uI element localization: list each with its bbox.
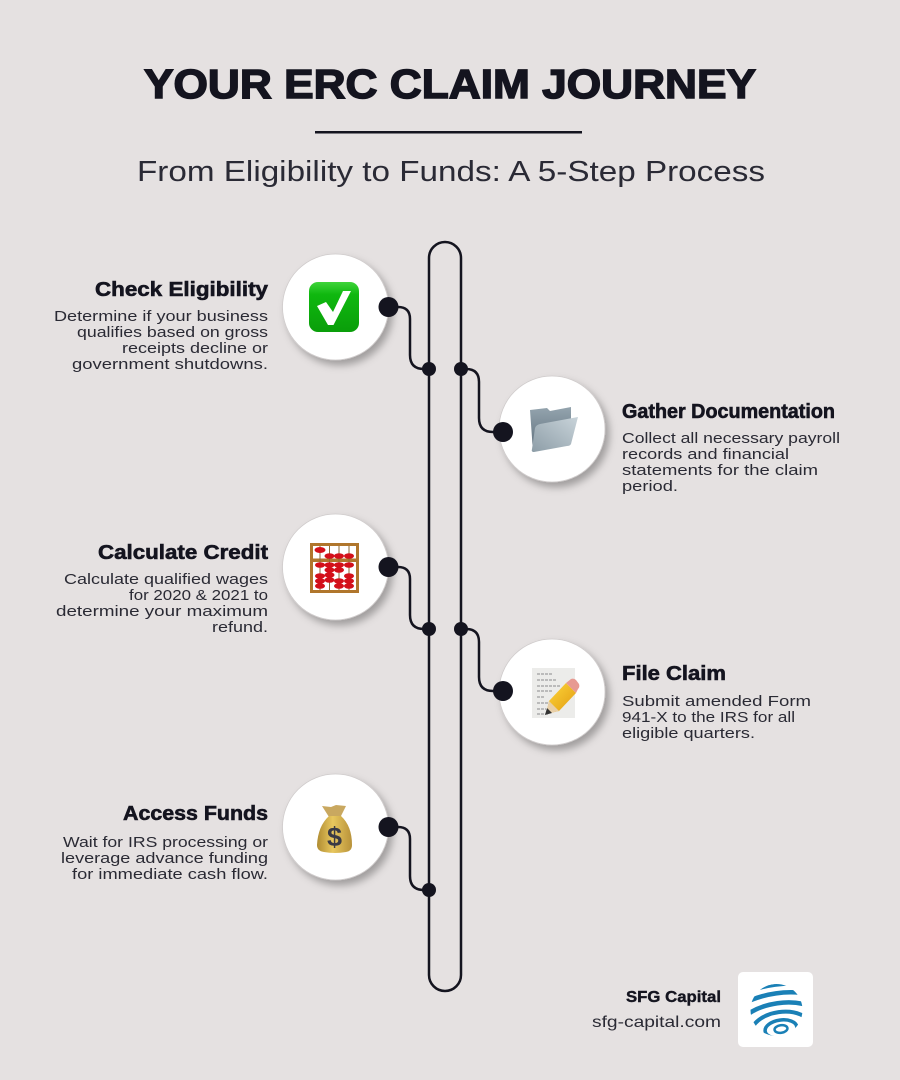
connector: step 4 [454,622,503,691]
icon: memo and pencil [493,639,605,745]
step 1 description: government shutdowns. [72,356,268,373]
connector: step 1 [389,307,436,376]
icon: money bag [282,774,398,880]
connector: step 5 [389,827,436,897]
subtitle: From Eligibility to Funds: A 5-Step Process [137,156,765,188]
step 1 description: receipts decline or [122,340,268,357]
footer brand [592,972,813,1047]
step 2: gather documentation [493,376,840,495]
step 4 heading: File Claim [622,663,726,685]
icon: money bag: $ [327,822,342,852]
title: YOUR ERC CLAIM JOURNEY [144,61,756,107]
connector: step 2 [454,362,503,432]
step 1: check eligibility [54,254,398,373]
step 1 description [54,308,268,373]
step 3 description: for 2020 & 2021 to [129,587,268,604]
step 2 description: statements for the claim [622,462,818,479]
step 3 heading: Calculate Credit [98,542,268,564]
step 4: file claim [493,639,811,745]
step 4 description [622,693,811,742]
step 5 heading: Access Funds [123,803,268,825]
step 2 description: Collect all necessary payroll [622,430,840,447]
step 5 description: leverage advance funding [61,850,268,867]
step 2 description [622,430,840,495]
step 3 description: refund. [212,619,268,636]
step 3 description [56,571,268,636]
icon: abacus [282,514,398,620]
step 2 description: period. [622,478,678,495]
step 3: calculate credit [56,514,398,636]
logo: striped globe [738,972,813,1047]
step 1 heading: Check Eligibility [95,279,269,301]
step 3 description: determine your maximum [56,603,268,620]
brand name: SFG Capital [626,989,721,1006]
step 5 description: for immediate cash flow. [72,866,268,883]
brand website: sfg-capital.com [592,1014,721,1031]
step 4 description: eligible quarters. [622,725,755,742]
step 1 description: Determine if your business [54,308,268,325]
step 5 description [61,834,268,883]
step 2 description: records and financial [622,446,789,463]
step 2 heading: Gather Documentation [622,401,835,423]
step 5: access funds [61,774,398,883]
step 5 description: Wait for IRS processing or [63,834,268,851]
step 4 description: 941-X to the IRS for all [622,709,795,726]
icon: check mark [282,254,398,360]
icon: folder [493,376,605,482]
step 3 description: Calculate qualified wages [64,571,268,588]
step 1 description: qualifies based on gross [77,324,268,341]
step 4 description: Submit amended Form [622,693,811,710]
timeline track [429,242,461,991]
connector: step 3 [389,567,436,636]
